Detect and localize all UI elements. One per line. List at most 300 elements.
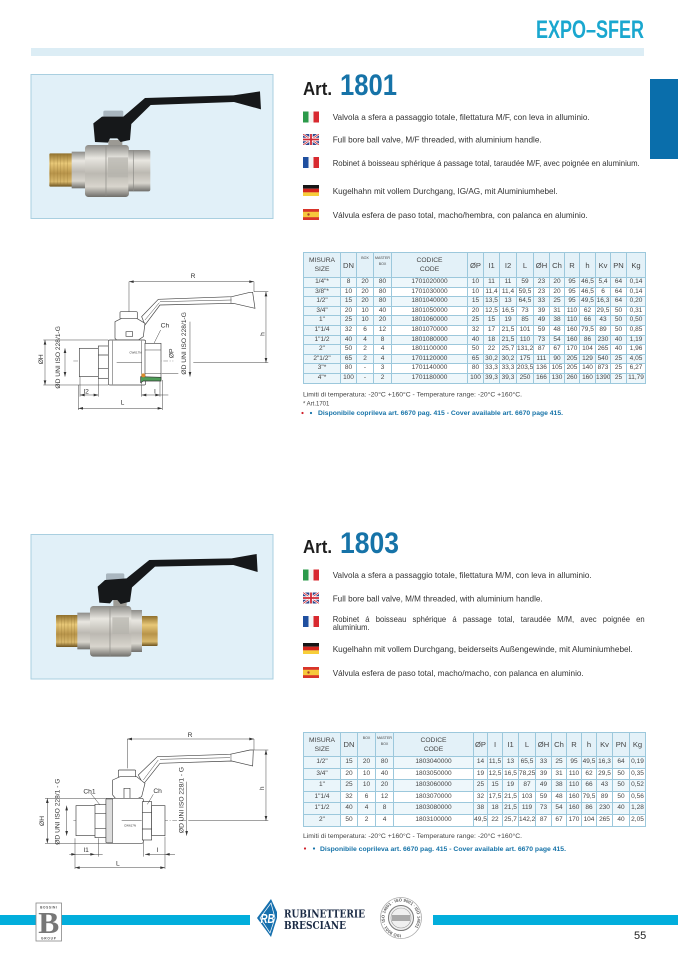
table: 1803 dimensions: 119 (522, 804, 532, 811)
table: 1801 dimensions: 50 (615, 326, 622, 333)
table: 1803 dimensions: 29,5 (598, 770, 611, 777)
table: 1803 dimensions: Kv (600, 740, 609, 749)
logo: Rubinetterie Bresciane: RB (260, 911, 274, 926)
technical drawing 1803: ØH (39, 816, 46, 826)
table: 1801 dimensions: 39,3 (485, 374, 498, 381)
table: 1801 dimensions: 1,96 (630, 345, 642, 352)
table: 1803 dimensions: 2" (319, 816, 325, 823)
table: 1801 dimensions: 20 (553, 278, 561, 285)
table: 1801 dimensions: 160 (582, 374, 593, 381)
table: 1803 dimensions: MISURA (309, 736, 335, 744)
table: 1803 dimensions: 32 (345, 793, 353, 800)
table: 1803 dimensions: 95 (570, 758, 578, 765)
notes 1803 (303, 834, 566, 853)
table: 1803 dimensions: 1803050000 (415, 770, 452, 777)
table: 1801 dimensions: 0,14 (630, 288, 642, 295)
table: 1801 dimensions: 10 (361, 316, 369, 323)
table: 1801 dimensions: 1801070000 (411, 326, 448, 333)
table: 1803 dimensions: 40 (345, 804, 353, 811)
table: 1803 dimensions: 38 (555, 781, 563, 788)
technical drawing 1803: Ch (153, 788, 162, 795)
table: 1803 dimensions: Kg (633, 740, 642, 749)
table: 1801 dimensions: 5,4 (598, 278, 608, 285)
technical drawing 1801: h (260, 332, 267, 336)
table: 1801 dimensions: 100 (470, 374, 481, 381)
table: 1803 dimensions: 1,28 (631, 804, 644, 811)
table: 1801 dimensions: 11 (505, 278, 511, 285)
table: 1801 dimensions: 87 (538, 345, 545, 352)
table: 1803 dimensions: 8 (383, 804, 386, 811)
table: 1803 dimensions: 40 (617, 816, 625, 823)
table: 1803 dimensions: 73 (540, 804, 547, 811)
table: 1803 dimensions: 25 (345, 781, 353, 788)
table: 1803 dimensions: 65,5 (521, 758, 533, 765)
table: 1801 dimensions: 203,5 (517, 364, 533, 371)
table: 1801 dimensions: 25 (615, 364, 622, 371)
table: 1803 dimensions: 54 (555, 804, 563, 811)
table: 1801 dimensions: 15 (472, 297, 479, 304)
table: 1801 dimensions: R (569, 260, 575, 270)
table: 1803 dimensions: 15 (491, 781, 499, 788)
description French: aluminium. (333, 622, 370, 632)
table: 1803 dimensions: 87 (540, 816, 547, 823)
table: 1801 dimensions: 160 (567, 336, 577, 343)
notes 1803: Disponibile coprileva art. 6670 pag. 415 - Cover available art. 6670 page 415. (320, 847, 566, 853)
table: 1803 dimensions: I1 (507, 740, 514, 749)
icon: flag Spain (303, 209, 319, 220)
table: 1803 dimensions: 1803100000 (415, 816, 452, 823)
table: 1801 dimensions: 1801040000 (411, 297, 448, 304)
table: 1801 dimensions: 23 (538, 288, 545, 295)
table: 1803 dimensions: 12,5 (489, 770, 501, 777)
text block: descriptions 1801 (303, 112, 640, 220)
icon: flag Spain (303, 667, 319, 678)
table: 1803 dimensions: 16,5 (504, 770, 517, 777)
table: 1801 dimensions: 54 (553, 336, 561, 343)
table: 1803 dimensions: 50 (617, 781, 625, 788)
table: 1803 dimensions: 25 (477, 781, 484, 788)
table: 1801 dimensions: 20 (379, 316, 386, 323)
table: 1801 dimensions: 1701030000 (411, 288, 448, 295)
table: 1801 dimensions: 20 (361, 288, 369, 295)
table: 1801 dimensions: 50 (615, 307, 622, 314)
table: 1803 dimensions: 11,5 (489, 758, 501, 765)
table: 1803 dimensions: 15 (345, 758, 353, 765)
table: 1801 dimensions: 30,2 (502, 355, 514, 362)
icon: flag UK (303, 134, 319, 145)
table: 1803 dimensions: CODICE (420, 736, 446, 744)
table: 1801 dimensions: 1/4"* (315, 278, 329, 285)
table: 1801 dimensions: 1390 (596, 374, 610, 381)
icon: flag France (303, 157, 319, 168)
table: 1803 dimensions: ØH (538, 740, 549, 749)
table: 1803 dimensions: 6 (365, 793, 368, 800)
table: 1801 dimensions: 80 (345, 364, 352, 371)
icon: flag UK (303, 592, 319, 604)
table: 1803 dimensions: 22 (491, 816, 499, 823)
technical drawing 1801: ØD UNI ISO 228/1-G (55, 326, 62, 389)
table: 1801 dimensions: SIZE (315, 266, 329, 273)
table: 1803 dimensions: 86 (585, 804, 593, 811)
technical drawing 1803: I (157, 847, 159, 854)
table: 1801 dimensions: 100 (343, 374, 354, 381)
table: 1803 dimensions: 43 (601, 781, 608, 788)
table: 1801 dimensions: CODE (420, 266, 439, 273)
table: 1803 dimensions: SIZE (315, 746, 329, 752)
table: 1803 dimensions: 40 (381, 770, 388, 777)
table: 1801 dimensions: 25 (615, 374, 622, 381)
table: 1801 dimensions: L (523, 260, 527, 270)
table: 1801 dimensions: 59 (521, 278, 529, 285)
table: 1803 dimensions: 160 (569, 793, 579, 800)
table: 1803 dimensions: 103 (522, 793, 532, 800)
logo: Rubinetterie Bresciane: RUBINETTERIE (284, 906, 365, 920)
table: 1801 dimensions: 1"1/4 (315, 326, 329, 333)
table: 1803 dimensions: 31 (555, 770, 563, 777)
description English: Full bore ball valve, M/M threaded, with aluminium handle. (333, 594, 543, 604)
table: 1801 dimensions: 11,4 (485, 288, 498, 295)
table: 1803 dimensions: 49 (540, 781, 547, 788)
table: 1803 dimensions: 89 (601, 793, 608, 800)
table: 1801 dimensions: 49 (538, 316, 545, 323)
table: 1801 dimensions: 11,4 (502, 288, 514, 295)
table: 1803 dimensions: 10 (363, 770, 370, 777)
logo: ISO certification seal: ISO 9001 · ISO 14001 · ISO 9001 · ISO 14001 (382, 898, 420, 938)
icon: flag Germany (303, 185, 319, 196)
table: 1801 dimensions: 20 (361, 297, 369, 304)
table: 1801 dimensions: 50 (615, 316, 622, 323)
table: 1801 dimensions: 8 (347, 278, 350, 285)
table: 1801 dimensions: - (364, 374, 366, 381)
table: 1801 dimensions: 48 (553, 326, 561, 333)
table: 1803 dimensions: 25 (555, 758, 563, 765)
table: 1801 dimensions: 0,14 (630, 278, 642, 285)
table: 1801 dimensions: 110 (567, 307, 577, 314)
heading: Art. 1803: 1803 (340, 527, 399, 560)
table: 1801 dimensions: 12,5 (485, 307, 498, 314)
table: 1801 dimensions: 33,3 (485, 364, 498, 371)
icon: flag France (303, 616, 319, 627)
logo: Bossini group: B (38, 905, 59, 940)
table: 1801 dimensions: 20 (553, 288, 561, 295)
table: 1801 dimensions: 104 (582, 345, 593, 352)
table: 1803 dimensions: 49,5 (474, 816, 487, 823)
table: 1803 dimensions: 66 (585, 781, 593, 788)
table: 1801 dimensions: 25,7 (502, 345, 514, 352)
table: 1801 dimensions: 40 (345, 336, 352, 343)
table: 1801 dimensions: 140 (582, 364, 593, 371)
table: 1801 dimensions: 18 (488, 336, 495, 343)
table: 1803 dimensions: 20 (363, 758, 370, 765)
table: 1801 dimensions: I2 (505, 260, 511, 270)
table: 1801 dimensions: MASTER (375, 256, 390, 260)
table: 1801 dimensions: 16,5 (502, 307, 514, 314)
table: 1801 dimensions: 21,5 (502, 326, 514, 333)
table: 1803 dimensions: 17,5 (489, 793, 501, 800)
table: 1801 dimensions: 160 (567, 326, 577, 333)
table: 1801 dimensions: 1"1/2 (315, 336, 329, 343)
logo: Rubinetterie Bresciane (257, 899, 365, 937)
table: 1801 dimensions: 65 (472, 355, 479, 362)
table: 1801 dimensions: 64 (615, 278, 622, 285)
table: 1801 dimensions: 21,5 (502, 336, 514, 343)
table: 1803 dimensions: 104 (584, 816, 594, 823)
table: 1801 dimensions: 25 (345, 316, 352, 323)
table: 1801 dimensions: h (585, 260, 590, 270)
table: 1801 dimensions: 59,5 (519, 288, 531, 295)
table: 1801 dimensions: 0,20 (630, 297, 642, 304)
table: 1803 dimensions: 265 (599, 816, 610, 823)
table: 1801 dimensions: 80 (379, 288, 386, 295)
table: 1803 dimensions: 67 (555, 816, 563, 823)
table: 1801 dimensions: 85 (521, 316, 529, 323)
table: 1803 dimensions: 21,5 (504, 793, 517, 800)
table: 1801 dimensions: 6 (363, 326, 367, 333)
table: 1803 dimensions: 13 (507, 758, 514, 765)
table: 1803 dimensions: PN (616, 740, 626, 749)
table: 1801 dimensions: 3/4" (316, 307, 328, 314)
table: 1803 dimensions: 38 (477, 804, 484, 811)
technical drawing 1801: I2 (83, 388, 89, 395)
table: 1801 dimensions: ØH (536, 260, 547, 270)
logo: Rubinetterie Bresciane: BRESCIANE (284, 918, 346, 932)
notes 1801: Disponibile coprileva art. 6670 pag. 415 - Cover available art. 6670 page 415. (318, 411, 563, 417)
table: 1801 dimensions: 46,5 (581, 278, 594, 285)
table: 1801 dimensions: 4 (363, 336, 367, 343)
table: 1801 dimensions: PN (613, 260, 624, 270)
table: 1801 dimensions: 250 (520, 374, 530, 381)
table: 1801 dimensions: 12 (379, 326, 386, 333)
table: 1803 dimensions: 170 (569, 816, 579, 823)
table: 1803 dimensions: R (571, 740, 577, 749)
table: 1801 dimensions: 8 (381, 336, 384, 343)
table: 1801 dimensions: CODICE (416, 257, 442, 264)
table: 1801 dimensions: 136 (536, 364, 547, 371)
table: 1801 dimensions: 0,85 (630, 326, 642, 333)
logo: Bossini group: BOSSINI (40, 906, 57, 910)
table: 1803 dimensions: 50 (617, 770, 625, 777)
table: 1803 dimensions: 230 (599, 804, 610, 811)
heading: Art. 1803: Art. (303, 537, 332, 557)
table: 1803 dimensions: 50 (345, 816, 353, 823)
table: 1803 dimensions: 20 (381, 781, 388, 788)
table: 1801 dimensions: Kg (631, 260, 641, 270)
table: 1803 dimensions: 160 (569, 804, 579, 811)
table: 1801 dimensions: 4,05 (630, 355, 642, 362)
table: 1801 dimensions: 80 (379, 297, 386, 304)
table: 1803 dimensions: 3/4" (316, 770, 328, 777)
table: 1801 dimensions: 50 (345, 345, 352, 352)
table: 1801 dimensions: 80 (472, 364, 479, 371)
table: 1801 dimensions: 230 (598, 336, 608, 343)
table: 1801 dimensions: 32 (472, 326, 479, 333)
table: 1803 dimensions: DN (344, 740, 354, 749)
table: 1801 dimensions: 95 (568, 297, 576, 304)
table: 1803 dimensions: 80 (381, 758, 388, 765)
table: 1801 dimensions: 6,27 (630, 364, 642, 371)
table: 1801 dimensions: 166 (536, 374, 547, 381)
table: 1803 dimensions: 16,3 (598, 758, 611, 765)
technical drawing 1803: ØD UNI ISO 228/1 - G (55, 779, 62, 845)
table: 1801 dimensions: 46,5 (581, 288, 594, 295)
table: 1803 dimensions: 2 (365, 816, 368, 823)
table: 1803 dimensions (303, 732, 646, 827)
table: 1801 dimensions: 1701180000 (412, 374, 447, 381)
table: 1803 dimensions: 14 (477, 758, 484, 765)
technical drawing 1803: Ch1 (83, 788, 96, 795)
table: 1801 dimensions: 43 (599, 316, 607, 323)
table: 1803 dimensions: 1803070000 (415, 793, 452, 800)
technical drawing 1801: R (191, 273, 196, 280)
technical drawing 1801: Ch (161, 323, 169, 330)
icon: flag Germany (303, 643, 319, 654)
table: 1803 dimensions: 142,2 (519, 816, 535, 823)
table: 1803 dimensions: BOX (363, 736, 370, 740)
table: 1801 dimensions: 86 (584, 336, 591, 343)
table: 1801 dimensions: 23 (538, 278, 545, 285)
technical drawing 1801: CW617N (129, 350, 141, 354)
table: 1801 dimensions: 11 (488, 278, 495, 285)
table: 1803 dimensions: 79,5 (583, 793, 595, 800)
table: 1801 dimensions: 90 (553, 355, 561, 362)
table: 1801 dimensions: DN (343, 260, 354, 270)
table: 1803 dimensions: 39 (540, 770, 547, 777)
text block: descriptions 1803 (303, 570, 645, 678)
table: 1801 dimensions: 20 (472, 307, 479, 314)
table: 1801 dimensions: 80 (379, 278, 386, 285)
table: 1803 dimensions: 1"1/4 (315, 793, 329, 800)
table: 1801 dimensions: 10 (361, 307, 369, 314)
table: 1803 dimensions: 1803080000 (415, 804, 452, 811)
table: 1803 dimensions: MASTER (377, 736, 392, 740)
table: 1801 dimensions: 40 (379, 307, 386, 314)
logo: Bossini group: GROUP (41, 936, 57, 940)
table: 1803 dimensions: 2,05 (631, 816, 644, 823)
table: 1801 dimensions: 4 (381, 345, 384, 352)
table: 1803 dimensions: 78,25 (519, 770, 535, 777)
table: 1801 dimensions: 64,5 (519, 297, 531, 304)
table: 1801 dimensions: 3 (381, 364, 384, 371)
table: 1801 dimensions: I1 (488, 260, 495, 270)
table: 1801 dimensions: 38 (553, 316, 561, 323)
table: 1803 dimensions: 18 (491, 804, 499, 811)
table: 1801 dimensions: 40 (615, 336, 622, 343)
table: 1801 dimensions: 1701140000 (412, 364, 447, 371)
table: 1801 dimensions: 40 (472, 336, 479, 343)
table: 1801 dimensions: 1701120000 (412, 355, 447, 362)
table: 1801 dimensions: 49,5 (581, 297, 594, 304)
table: 1801 dimensions: BOX (361, 256, 369, 260)
description French (333, 614, 645, 632)
table: 1801 dimensions: 13 (504, 297, 512, 304)
table: 1801 dimensions: 33 (538, 297, 545, 304)
table: 1801 dimensions: 265 (598, 345, 608, 352)
table: 1803 dimensions: 21,5 (504, 804, 517, 811)
table: 1801 dimensions: 0,31 (630, 307, 642, 314)
table: 1803 dimensions: 59 (540, 793, 547, 800)
table: 1803 dimensions: L (525, 740, 529, 749)
table: 1803 dimensions: 64 (617, 758, 625, 765)
table: 1801 dimensions: 10 (472, 278, 479, 285)
table: 1803 dimensions: 0,56 (631, 793, 644, 800)
table: 1803 dimensions: 48 (555, 793, 563, 800)
table: 1801 dimensions: 2"1/2" (313, 355, 331, 362)
description French: Robinet á boisseau sphérique á passage total, taraudée M/M, avec poignée en (333, 614, 645, 624)
table: 1801 dimensions: 50 (472, 345, 479, 352)
table: 1801 dimensions: 6 (601, 288, 605, 295)
table: 1803 dimensions: 1"1/2 (315, 804, 329, 811)
table: 1803 dimensions: 4 (365, 804, 368, 811)
table: 1801 dimensions: 59 (538, 326, 545, 333)
table: 1803 dimensions: 33 (540, 758, 547, 765)
table: 1801 dimensions: 110 (567, 316, 577, 323)
table: 1803 dimensions: 20 (345, 770, 353, 777)
technical drawing 1801: ØD UNI ISO 228/1-G (181, 312, 188, 375)
technical drawing 1803: R (188, 732, 193, 739)
table: 1803 dimensions: 0,52 (631, 781, 644, 788)
table: 1803 dimensions: h (587, 740, 591, 749)
panel: photo of valve 1801 (31, 74, 273, 218)
header bar (31, 48, 644, 56)
table: 1801 dimensions: 873 (598, 364, 608, 371)
table: 1801 dimensions: 1801100000 (412, 345, 447, 352)
notes 1801: Limiti di temperatura: -20°C +160°C - Temperature range: -20°C +160°C. (303, 392, 522, 398)
table: 1803 dimensions: CODE (424, 746, 443, 752)
table: 1803 dimensions: 1" (319, 781, 325, 788)
table: 1801 dimensions: 101 (520, 326, 530, 333)
technical drawing 1801: ØP (169, 348, 176, 358)
notes 1803: Limiti di temperatura: -20°C +160°C - Temperature range: -20°C +160°C. (303, 834, 522, 840)
technical drawing 1801: ØH (38, 354, 45, 364)
table: 1803 dimensions: BOX (381, 742, 388, 746)
table: 1803 dimensions: 110 (569, 770, 579, 777)
table: 1801 dimensions: 3"* (318, 364, 326, 371)
table: 1803 dimensions: ØP (475, 740, 486, 749)
table: 1801 dimensions: 130 (552, 374, 562, 381)
table: 1801 dimensions: 13,5 (485, 297, 498, 304)
table: 1801 dimensions: 25 (472, 316, 479, 323)
icon: valve photo 1801 (49, 91, 261, 197)
table: 1801 dimensions: 95 (568, 288, 576, 295)
table: 1801 dimensions: 260 (567, 374, 577, 381)
notes 1801: * Art.1701 (303, 402, 330, 408)
heading: Art. 1801: 1801 (340, 69, 397, 102)
table: 1803 dimensions: 110 (569, 781, 579, 788)
table: 1801 dimensions: ØP (470, 260, 481, 270)
description Italian: Valvola a sfera a passaggio totale, filettatura M/F, con leva in alluminio. (333, 112, 590, 122)
table: 1801 dimensions: 79,5 (581, 326, 594, 333)
table: 1801 dimensions: 4 (381, 355, 384, 362)
technical drawing 1803: ØD UNI ISO 228/1 - G (178, 767, 185, 833)
technical drawing 1801: L (121, 400, 125, 407)
page number: 55 (634, 930, 646, 942)
table: 1803 dimensions: 1803040000 (415, 758, 452, 765)
table: 1803 dimensions: Ch (554, 740, 564, 749)
table: 1801 dimensions: 11,79 (628, 374, 644, 381)
table: 1801 dimensions: 65 (345, 355, 352, 362)
technical drawing 1801 (38, 273, 268, 410)
table: 1801 dimensions: 3/8"* (315, 288, 329, 295)
table: 1801 dimensions: 1801080000 (411, 336, 448, 343)
heading: Art. 1803 (303, 527, 399, 560)
table: 1801 dimensions: 39,3 (502, 374, 514, 381)
technical drawing 1801: I (154, 388, 156, 395)
technical drawing 1803 (39, 732, 268, 869)
table: 1801 dimensions: 2 (381, 374, 384, 381)
table: 1801 dimensions: BOX (379, 262, 386, 266)
table: 1803 dimensions: 62 (585, 770, 593, 777)
table: 1801 dimensions: 73 (521, 307, 529, 314)
